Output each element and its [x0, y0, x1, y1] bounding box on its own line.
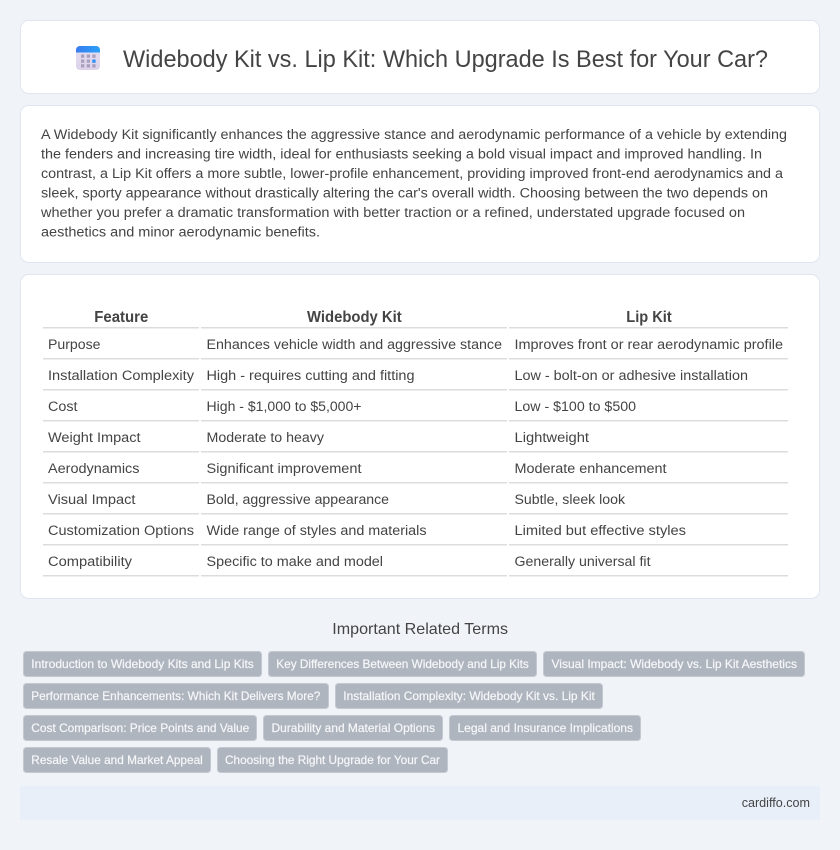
table header row	[43, 309, 788, 328]
panel: header	[20, 20, 820, 94]
panel: related term tags	[24, 652, 804, 772]
tag: visual impact: Visual Impact: Widebody vs. Lip Kit Aesthetics	[552, 657, 797, 671]
tag: durability	[264, 716, 442, 740]
text block: introduction paragraph: whether you prefer a dramatic transformation with better traction or a refined, understated upgrade focused on	[40, 205, 745, 221]
table row: Customization Options: Wide range of styles and materials	[206, 523, 426, 539]
table row: Weight Impact: Weight Impact	[48, 430, 141, 446]
table row: Visual Impact: Visual Impact	[48, 492, 136, 508]
table header row: Widebody Kit	[307, 309, 402, 326]
tag: performance enhancements: Performance Enhancements: Which Kit Delivers More?	[31, 689, 321, 703]
text block: introduction paragraph: aesthetics and minor aerodynamic benefits.	[41, 224, 320, 240]
text block: introduction paragraph: sleek, sporty appearance without drastically altering the car's overall width. Choosing between the two depends on	[41, 186, 768, 202]
tag: installation complexity	[336, 684, 602, 708]
tag: introduction	[24, 652, 262, 676]
tag: durability: Durability and Material Options	[272, 721, 435, 735]
tag: cost comparison	[24, 716, 256, 740]
table row: Cost: High - $1,000 to $5,000+	[206, 399, 362, 415]
tag: cost comparison: Cost Comparison: Price Points and Value	[31, 721, 250, 735]
tag: visual impact	[544, 652, 804, 676]
tag: installation complexity: Installation Complexity: Widebody Kit vs. Lip Kit	[343, 689, 595, 703]
tag: introduction: Introduction to Widebody Kits and Lip Kits	[31, 657, 254, 671]
table row: Visual Impact: Bold, aggressive appearance	[206, 492, 389, 508]
footer	[20, 786, 820, 820]
table row: Weight Impact	[43, 430, 788, 452]
table row: Compatibility: Generally universal fit	[514, 554, 651, 570]
title: Widebody Kit vs. Lip Kit: Which Upgrade Is Best for Your Car?	[123, 46, 768, 73]
tag: resale value: Resale Value and Market Appeal	[31, 753, 203, 767]
table header row: Feature	[94, 309, 149, 326]
table row: Visual Impact	[43, 492, 788, 514]
table row: Installation Complexity: Low - bolt-on or adhesive installation	[514, 368, 748, 384]
tag: key differences: Key Differences Between Widebody and Lip Kits	[276, 657, 529, 671]
icon: calendar	[76, 46, 100, 70]
table row: Compatibility: Specific to make and model	[206, 554, 383, 570]
table row: Compatibility: Compatibility	[48, 554, 133, 570]
table row: Compatibility	[43, 554, 788, 576]
table row: Purpose: Improves front or rear aerodynamic profile	[514, 337, 783, 353]
panel: introduction	[20, 106, 820, 262]
text block: introduction paragraph: A Widebody Kit significantly enhances the aggressive stance and aerodynamic performance of a vehicle by extending	[41, 127, 787, 143]
tag: legal and insurance: Legal and Insurance Implications	[458, 721, 633, 735]
table row: Visual Impact: Subtle, sleek look	[514, 492, 626, 508]
table row: Weight Impact: Moderate to heavy	[206, 430, 325, 446]
text block: introduction paragraph	[40, 127, 787, 240]
tag: choosing the right upgrade: Choosing the Right Upgrade for Your Car	[225, 753, 440, 767]
footer: cardiffo.com	[742, 795, 810, 810]
table row: Installation Complexity: High - requires cutting and fitting	[206, 368, 414, 384]
table row: Aerodynamics: Aerodynamics	[48, 461, 140, 477]
table row: Customization Options	[43, 523, 788, 546]
table row: Purpose	[43, 337, 788, 360]
tag: choosing the right upgrade	[218, 748, 448, 772]
table row: Purpose: Enhances vehicle width and aggressive stance	[206, 337, 502, 353]
tag: resale value	[24, 748, 210, 772]
tag: performance enhancements	[24, 684, 328, 708]
table row: Customization Options: Limited but effective styles	[514, 523, 686, 539]
table row: Installation Complexity: Installation Complexity	[48, 368, 195, 384]
panel: comparison table	[20, 274, 820, 598]
table row: Aerodynamics: Moderate enhancement	[514, 461, 667, 477]
table row: Weight Impact: Lightweight	[514, 430, 589, 446]
table row: Cost: Low - $100 to $500	[514, 399, 636, 415]
table row: Aerodynamics: Significant improvement	[206, 461, 362, 477]
text block: introduction paragraph: the fenders and increasing tire width, ideal for enthusiasts seeking a bold visual impact and improved handling. In	[41, 146, 762, 162]
table row: Customization Options: Customization Options	[48, 523, 194, 539]
tag: legal and insurance	[450, 716, 640, 740]
text block: introduction paragraph: contrast, a Lip Kit offers a more subtle, lower-profile enhancement, providing improved front-end aerodynamics and a	[41, 166, 783, 182]
table row: Aerodynamics	[43, 461, 788, 484]
table row: Cost	[43, 399, 788, 422]
table row: Installation Complexity	[43, 368, 788, 390]
table row: Purpose: Purpose	[48, 337, 101, 353]
table row: Cost: Cost	[48, 399, 78, 415]
heading: important related terms: Important Related Terms	[332, 621, 508, 638]
table header row: Lip Kit	[626, 309, 672, 326]
tag: key differences	[268, 652, 536, 676]
